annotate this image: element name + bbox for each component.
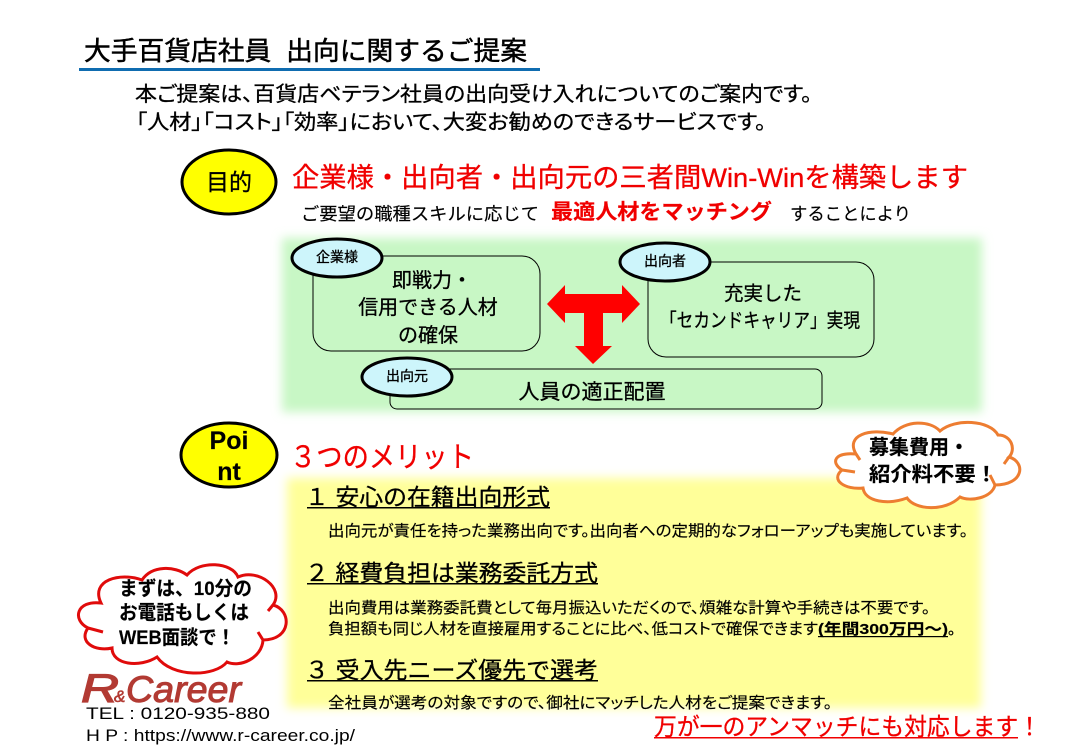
title: 大手百貨店社員 出向に関するご提案 <box>84 36 527 66</box>
card: 出向者: 出向者 <box>644 253 686 269</box>
merit 2 <box>305 560 963 638</box>
callout: no recruiting fee: 募集費用・ <box>869 436 969 459</box>
card: 企業様: 即戦力・ <box>392 269 472 292</box>
purpose subheading: ご要望の職種スキルに応じて <box>301 204 539 224</box>
callout: interview invitation: WEB面談で！ <box>119 627 235 649</box>
arrow: three-way red T arrow <box>547 285 640 364</box>
merit 2: (年間300万円～) <box>818 620 948 638</box>
panel: merits <box>287 478 981 712</box>
merit 2: 負担額も同じ人材を直接雇用することに比べ、低コストで確保できます <box>328 620 818 638</box>
merit 3: ３ 受入先ニーズ優先で選考 <box>305 657 598 683</box>
logo: R&Career: & <box>114 687 125 706</box>
merit 3 <box>305 657 832 712</box>
contact details: TEL : 0120-935-880 <box>86 704 270 723</box>
card: 出向者: 充実した <box>724 283 802 305</box>
card: 出向元 <box>362 358 822 409</box>
card: 企業様: 企業様 <box>316 249 358 265</box>
merit 2: 。 <box>948 621 963 638</box>
intro text <box>135 83 812 134</box>
merit 3: 全社員が選考の対象ですので、御社にマッチした人材をご提案できます。 <box>328 694 832 712</box>
callout: no recruiting fee <box>836 422 1020 508</box>
merit 2: 出向費用は業務委託費として毎月振込いただくので、煩雑な計算や手続きは不要です。 <box>328 598 930 617</box>
card: 企業様: の確保 <box>398 324 458 347</box>
card: 出向元: 人員の適正配置 <box>518 381 666 404</box>
logo: R&Career <box>81 667 243 711</box>
intro text: 「人材」「コスト」「効率」において、大変お勧めのできるサービスです。 <box>136 111 766 134</box>
badge: Point <box>181 423 277 487</box>
panel: three-way relationship <box>282 238 982 412</box>
closing statement: 万が一のアンマッチにも対応します！ <box>654 714 1041 741</box>
logo: R&Career: Career <box>126 669 243 710</box>
purpose subheading: 最適人材をマッチング <box>551 200 772 224</box>
merit 1 <box>305 484 968 540</box>
purpose heading: 企業様・出向者・出向元の三者間Win-Winを構築します <box>292 163 968 193</box>
merit 2: ２ 経費負担は業務委託方式 <box>305 560 598 586</box>
badge: Point: Poi <box>210 427 248 455</box>
contact details <box>86 704 355 745</box>
badge: 目的: 目的 <box>206 169 252 195</box>
callout: no recruiting fee: 紹介料不要！ <box>869 463 997 486</box>
logo: R&Career: R <box>81 667 119 711</box>
badge: Point: nt <box>217 458 241 486</box>
purpose subheading <box>301 200 911 224</box>
callout: interview invitation: まずは、10分の <box>119 578 252 600</box>
card: 企業様: 信用できる人材 <box>358 296 498 319</box>
card: 出向者: 「セカンドキャリア」実現 <box>660 310 860 332</box>
contact details: H P : https://www.r-career.co.jp/ <box>86 726 355 745</box>
intro text: 本ご提案は、百貨店ベテラン社員の出向受け入れについてのご案内です。 <box>135 83 812 106</box>
callout: interview invitation: お電話もしくは <box>119 602 249 624</box>
badge: 目的 <box>182 150 276 214</box>
card: 出向元: 出向元 <box>386 368 428 384</box>
card: 出向者 <box>620 243 874 357</box>
callout: interview invitation <box>78 565 286 673</box>
merits heading: ３つのメリット <box>290 442 474 474</box>
purpose subheading: することにより <box>790 204 911 224</box>
card: 企業様 <box>292 239 540 351</box>
merit 1: １ 安心の在籍出向形式 <box>305 484 550 510</box>
merit 1: 出向元が責任を持った業務出向です。出向者への定期的なフォローアップも実施しています。 <box>328 522 968 540</box>
